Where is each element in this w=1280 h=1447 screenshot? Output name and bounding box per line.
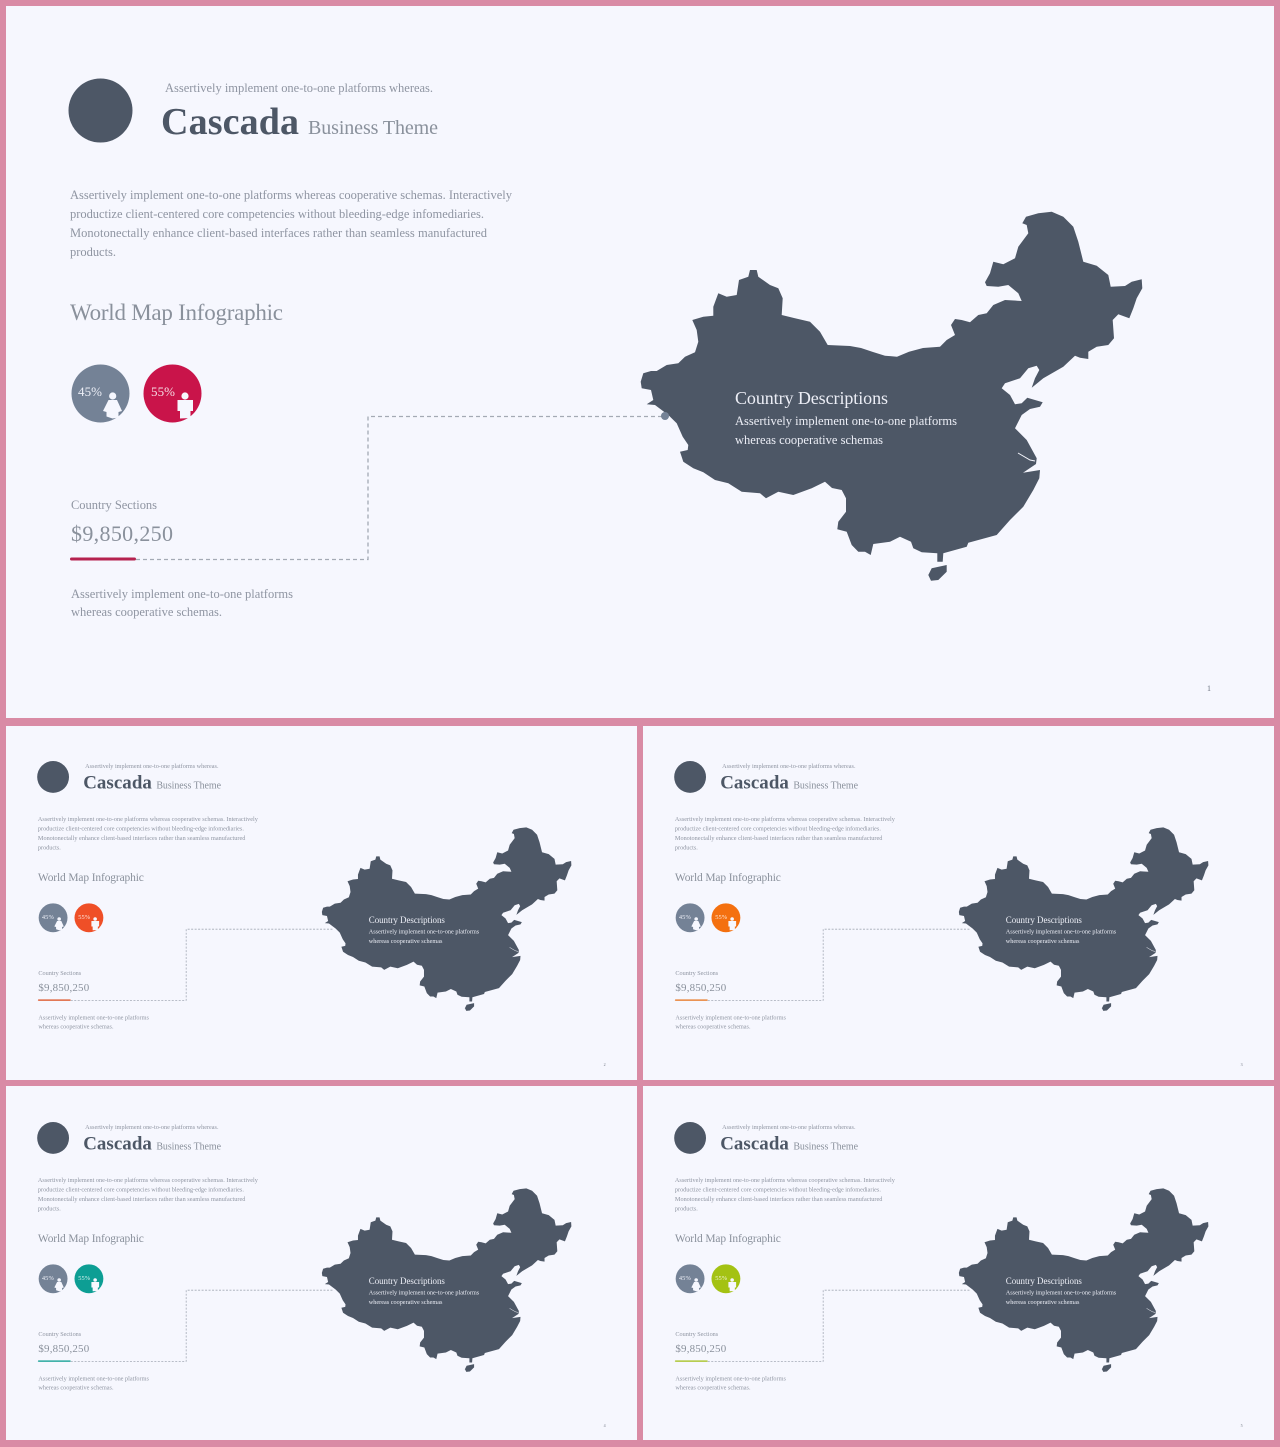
male percentage circle: 55%	[715, 1275, 728, 1282]
map description	[1006, 928, 1117, 945]
male percentage circle	[74, 903, 103, 932]
header tagline: Assertively implement one-to-one platforms whereas.	[722, 763, 856, 770]
intro paragraph: Monotonectally enhance client-based interfaces rather than seamless manufactured	[675, 835, 883, 842]
female percentage circle	[676, 1264, 705, 1293]
male percentage circle	[74, 1264, 103, 1293]
female percentage circle: 45%	[42, 1275, 54, 1282]
intro paragraph	[70, 188, 513, 259]
intro paragraph: productize client-centered core competencies without bleeding-edge infomediaries.	[675, 825, 881, 832]
dashed connector	[71, 1290, 334, 1361]
dashed connector	[136, 416, 665, 560]
female percentage circle: 45%	[78, 384, 102, 399]
map description: whereas cooperative schemas	[369, 1299, 443, 1306]
female percentage circle: 45%	[42, 914, 54, 921]
subtitle: Business Theme	[156, 1142, 222, 1153]
map description: whereas cooperative schemas	[1006, 1299, 1080, 1306]
intro paragraph: products.	[675, 1205, 698, 1212]
accent bar	[70, 558, 136, 560]
description	[71, 587, 293, 619]
description: Assertively implement one-to-one platforms	[71, 587, 293, 601]
map description: Assertively implement one-to-one platforms	[369, 1289, 480, 1296]
section heading: World Map Infographic	[38, 1233, 144, 1245]
section heading: World Map Infographic	[38, 872, 144, 884]
accent bar	[38, 999, 71, 1001]
panel: slide 2 (red-orange)	[6, 726, 637, 1080]
section heading: World Map Infographic	[675, 1233, 781, 1245]
page number: 1	[1207, 684, 1211, 693]
subtitle: Business Theme	[156, 781, 222, 792]
intro paragraph: productize client-centered core competencies without bleeding-edge infomediaries.	[675, 1186, 881, 1193]
intro paragraph: products.	[38, 844, 61, 851]
value: $9,850,250	[71, 521, 173, 546]
page number: 4	[604, 1423, 606, 1428]
map description: whereas cooperative schemas	[735, 433, 883, 447]
intro paragraph: products.	[675, 844, 698, 851]
map heading: Country Descriptions	[1006, 915, 1082, 925]
map of China	[959, 1188, 1208, 1372]
subtitle: Business Theme	[308, 117, 438, 139]
description: whereas cooperative schemas.	[71, 605, 222, 619]
map description	[1006, 1289, 1117, 1306]
female percentage circle: 45%	[679, 914, 691, 921]
accent bar	[38, 1360, 71, 1362]
map description: Assertively implement one-to-one platforms	[1006, 928, 1117, 935]
map description	[369, 1289, 480, 1306]
intro paragraph: Monotonectally enhance client-based interfaces rather than seamless manufactured	[38, 1196, 246, 1203]
intro paragraph: Assertively implement one-to-one platforms whereas cooperative schemas. Interactively	[70, 188, 513, 202]
description: Assertively implement one-to-one platforms	[38, 1376, 149, 1383]
country sections label: Country Sections	[38, 970, 82, 977]
intro paragraph: Monotonectally enhance client-based interfaces rather than seamless manufactured	[675, 1196, 883, 1203]
country sections label: Country Sections	[675, 1331, 719, 1338]
description: whereas cooperative schemas.	[675, 1384, 751, 1391]
intro paragraph: productize client-centered core competencies without bleeding-edge infomediaries.	[38, 1186, 244, 1193]
female percentage circle: 45%	[679, 1275, 691, 1282]
male percentage circle: 55%	[78, 914, 91, 921]
value: $9,850,250	[38, 982, 90, 994]
female percentage circle	[39, 903, 68, 932]
country sections label: Country Sections	[71, 498, 157, 512]
panel: slide 4 (teal)	[6, 1086, 637, 1440]
intro paragraph: Monotonectally enhance client-based interfaces rather than seamless manufactured	[70, 226, 488, 240]
description	[38, 1015, 149, 1030]
map description	[369, 928, 480, 945]
title: Cascada	[720, 1134, 789, 1155]
intro paragraph: products.	[38, 1205, 61, 1212]
header tagline: Assertively implement one-to-one platforms whereas.	[165, 81, 433, 95]
description: whereas cooperative schemas.	[38, 1384, 114, 1391]
accent bar	[675, 1360, 708, 1362]
intro paragraph	[675, 816, 896, 851]
map of China	[322, 1188, 571, 1372]
description: whereas cooperative schemas.	[38, 1023, 114, 1030]
description	[675, 1376, 786, 1391]
value: $9,850,250	[675, 1343, 727, 1355]
page number: 2	[604, 1062, 606, 1067]
header tagline: Assertively implement one-to-one platforms whereas.	[85, 763, 219, 770]
title: Cascada	[83, 1134, 152, 1155]
dashed connector	[71, 929, 334, 1000]
dashed connector	[708, 1290, 971, 1361]
section heading: World Map Infographic	[70, 300, 283, 325]
map of China	[322, 827, 571, 1011]
header tagline: Assertively implement one-to-one platforms whereas.	[722, 1124, 856, 1131]
intro paragraph	[38, 1177, 259, 1212]
header tagline: Assertively implement one-to-one platforms whereas.	[85, 1124, 219, 1131]
intro paragraph	[675, 1177, 896, 1212]
title: Cascada	[83, 773, 152, 794]
map heading: Country Descriptions	[735, 388, 888, 408]
header circle	[674, 761, 706, 793]
title: Cascada	[720, 773, 789, 794]
male percentage circle: 55%	[78, 1275, 91, 1282]
intro paragraph: Monotonectally enhance client-based interfaces rather than seamless manufactured	[38, 835, 246, 842]
intro paragraph: Assertively implement one-to-one platforms whereas cooperative schemas. Interactively	[38, 1177, 259, 1184]
female percentage circle	[72, 364, 130, 422]
intro paragraph	[38, 816, 259, 851]
intro paragraph: products.	[70, 245, 116, 259]
description	[38, 1376, 149, 1391]
map of China	[959, 827, 1208, 1011]
map heading: Country Descriptions	[369, 915, 445, 925]
intro paragraph: Assertively implement one-to-one platforms whereas cooperative schemas. Interactively	[675, 1177, 896, 1184]
description	[675, 1015, 786, 1030]
dashed connector	[708, 929, 971, 1000]
intro paragraph: Assertively implement one-to-one platforms whereas cooperative schemas. Interactively	[38, 816, 259, 823]
value: $9,850,250	[675, 982, 727, 994]
intro paragraph: Assertively implement one-to-one platforms whereas cooperative schemas. Interactively	[675, 816, 896, 823]
description: Assertively implement one-to-one platforms	[675, 1015, 786, 1022]
map heading: Country Descriptions	[1006, 1276, 1082, 1286]
subtitle: Business Theme	[793, 781, 859, 792]
map description: whereas cooperative schemas	[1006, 938, 1080, 945]
subtitle: Business Theme	[793, 1142, 859, 1153]
male percentage circle	[144, 364, 202, 422]
map description: whereas cooperative schemas	[369, 938, 443, 945]
female percentage circle	[39, 1264, 68, 1293]
description: Assertively implement one-to-one platforms	[38, 1015, 149, 1022]
male percentage circle: 55%	[151, 384, 175, 399]
country sections label: Country Sections	[38, 1331, 82, 1338]
country sections label: Country Sections	[675, 970, 719, 977]
description: Assertively implement one-to-one platforms	[675, 1376, 786, 1383]
header circle	[674, 1122, 706, 1154]
panel: slide 5 (lime)	[643, 1086, 1274, 1440]
header circle	[68, 78, 132, 142]
section heading: World Map Infographic	[675, 872, 781, 884]
connector dot	[661, 412, 669, 420]
female percentage circle	[676, 903, 705, 932]
map description: Assertively implement one-to-one platforms	[735, 414, 957, 428]
male percentage circle	[711, 1264, 740, 1293]
intro paragraph: productize client-centered core competencies without bleeding-edge infomediaries.	[70, 207, 484, 221]
intro paragraph: productize client-centered core competencies without bleeding-edge infomediaries.	[38, 825, 244, 832]
value: $9,850,250	[38, 1343, 90, 1355]
map description: Assertively implement one-to-one platforms	[369, 928, 480, 935]
header circle	[37, 1122, 69, 1154]
map of China	[641, 212, 1142, 581]
header circle	[37, 761, 69, 793]
map description	[735, 414, 957, 447]
accent bar	[675, 999, 708, 1001]
description: whereas cooperative schemas.	[675, 1023, 751, 1030]
map description: Assertively implement one-to-one platforms	[1006, 1289, 1117, 1296]
map heading: Country Descriptions	[369, 1276, 445, 1286]
page number: 3	[1241, 1062, 1243, 1067]
page number: 5	[1241, 1423, 1243, 1428]
male percentage circle: 55%	[715, 914, 728, 921]
male percentage circle	[711, 903, 740, 932]
panel: slide 3 (orange)	[643, 726, 1274, 1080]
title: Cascada	[161, 101, 299, 143]
panel: main slide	[6, 6, 1274, 718]
